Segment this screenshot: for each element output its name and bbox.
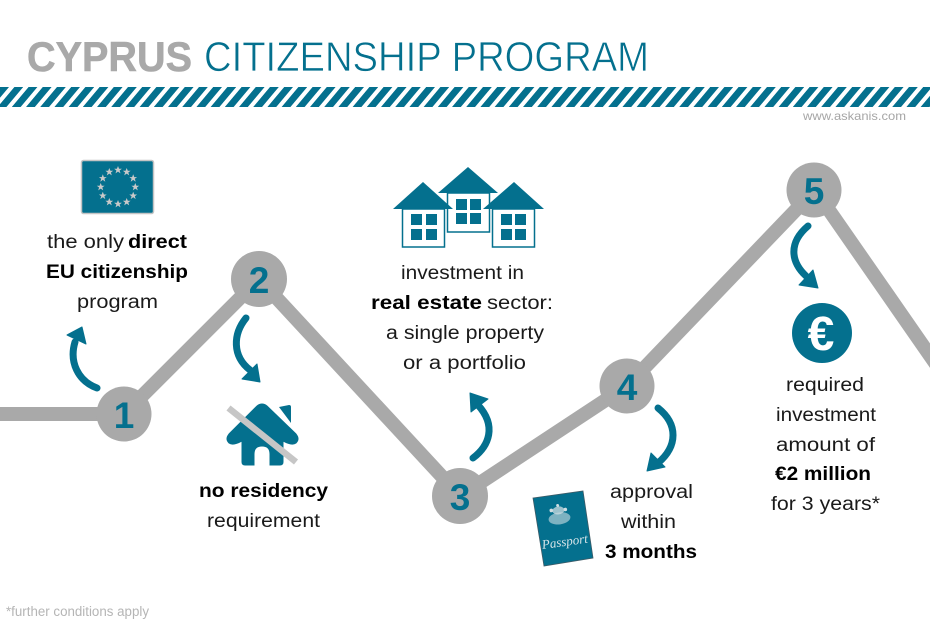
text: step 1: direct (128, 232, 188, 253)
text: step 5: amount of (776, 435, 876, 456)
icon: houses (393, 167, 544, 247)
arrow: step 5 to euro (794, 226, 818, 288)
text: step 5: for 3 years* (771, 494, 881, 515)
website credit: www.askanis.com (802, 109, 906, 123)
text: step 1: EU citizenship (46, 262, 188, 283)
text: step 3: real estate (371, 293, 482, 314)
text: step 2 (199, 481, 328, 532)
text: step 4: 3 months (605, 542, 697, 563)
title (27, 33, 649, 80)
icon: euro coin: € (808, 308, 834, 361)
step 1 node: 1 (114, 395, 134, 436)
step 3 node: 3 (450, 477, 470, 518)
timeline path (0, 190, 930, 496)
arrow: step 1 to text (67, 327, 97, 388)
icon: passport: Passport (540, 531, 589, 552)
text: step 4: within (620, 512, 676, 533)
text: step 1: program (77, 292, 158, 313)
icon: passport (533, 491, 593, 566)
step 4 node (600, 358, 654, 414)
text: step 4 (605, 482, 697, 563)
text: step 2: no residency (199, 481, 328, 502)
text: step 3: a single property (386, 323, 545, 344)
text: step 3 (371, 263, 553, 374)
footnote: *further conditions apply (6, 604, 149, 619)
step 3 node (432, 468, 488, 524)
text: step 5: investment (776, 405, 877, 426)
step 2 node (231, 251, 287, 307)
text: step 3: or a portfolio (403, 353, 526, 374)
title: CYPRUS (27, 33, 192, 80)
striped banner (0, 87, 930, 107)
text: step 3: sector: (487, 293, 553, 314)
arrow: step 4 to text (647, 408, 673, 471)
text: step 5: required (786, 375, 864, 396)
step 5 node (786, 162, 842, 218)
arrow: step 3 to text (470, 393, 489, 458)
icon: euro coin (792, 303, 852, 363)
text: step 5 (771, 375, 881, 515)
step 2 node: 2 (249, 260, 269, 301)
text: step 1: the only (47, 232, 125, 253)
icon: crossed-out house (227, 404, 298, 465)
step 4 node: 4 (617, 367, 638, 408)
text: step 2: requirement (207, 511, 321, 532)
text: step 4: approval (610, 482, 693, 503)
icon: EU flag (82, 160, 154, 214)
text: step 1 (46, 232, 188, 313)
step 5 node: 5 (804, 171, 824, 212)
arrow: step 2 to house (236, 318, 260, 382)
text: step 3: investment in (401, 263, 524, 284)
step 1 node (96, 386, 152, 442)
text: step 5: €2 million (775, 464, 871, 485)
title: CITIZENSHIP PROGRAM (204, 33, 649, 80)
